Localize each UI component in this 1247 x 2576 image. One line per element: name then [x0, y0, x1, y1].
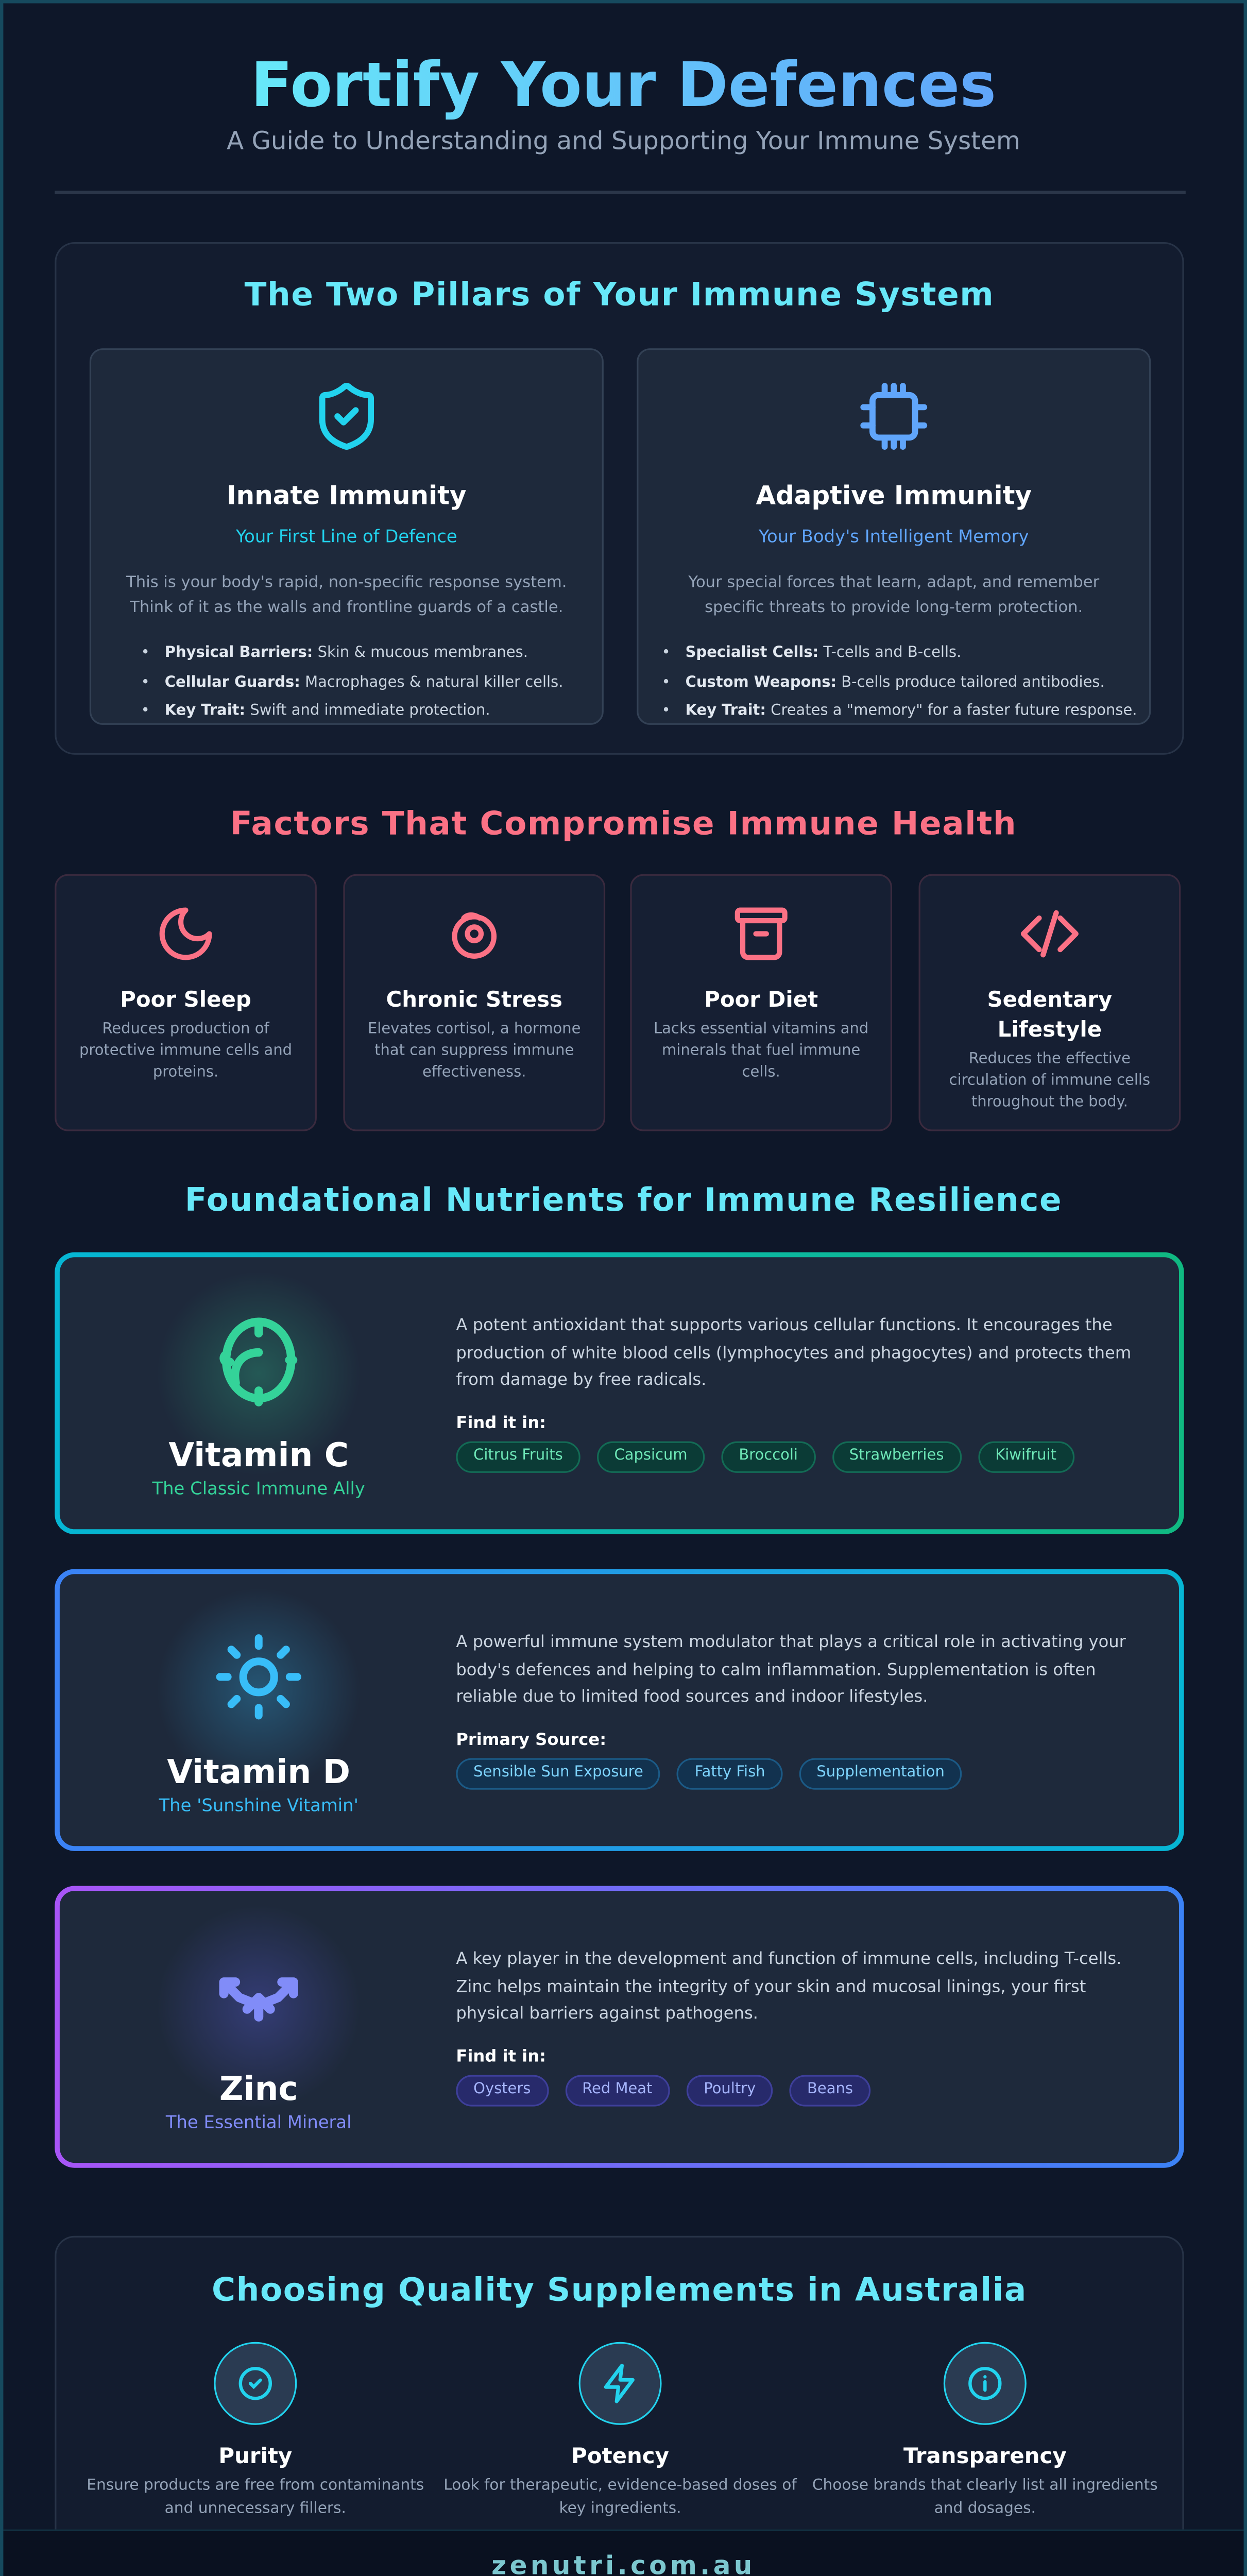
panel: zinc: A key player in the development and function of immune cells, including T-cells. Zinc helps maintain the integrity of your skin and mucosal linings, your first physical barriers against pathogens. [456, 1951, 1121, 2024]
card: adaptive immunity: Adaptive Immunity [756, 481, 1032, 511]
item: transparency: Transparency [903, 2445, 1067, 2470]
icon: vitamin c [219, 1318, 298, 1406]
panel: vitamin d: The 'Sunshine Vitamin' [159, 1797, 358, 1816]
panel: zinc: Find it in: [456, 2048, 546, 2066]
card: innate immunity: Physical Barriers: Skin & mucous membranes. [165, 645, 528, 662]
icon: code [1021, 910, 1079, 957]
panel: zinc [55, 1886, 1184, 2168]
icon: sun [216, 1634, 301, 1720]
card: poor diet: Lacks essential vitamins and minerals that fuel immune cells. [654, 1022, 868, 1081]
item: potency: Potency [571, 2445, 669, 2470]
panel: vitamin c: Vitamin C [168, 1435, 349, 1475]
item: purity [87, 2342, 424, 2517]
icon: zinc [219, 1977, 298, 2022]
panel: vitamin d [55, 1569, 1184, 1851]
item: transparency: Choose brands that clearly list all ingredients and dosages. [812, 2477, 1158, 2517]
panel: two pillars [55, 242, 1184, 755]
icon: check circle [214, 2342, 297, 2425]
panel: vitamin c: Capsicum [614, 1448, 688, 1465]
heading: factors: Factors That Compromise Immune Health [230, 804, 1017, 842]
panel: vitamin c: The Classic Immune Ally [152, 1480, 365, 1499]
card: innate immunity: Cellular Guards: Macrophages & natural killer cells. [165, 674, 563, 691]
card: innate immunity: Key Trait: Swift and immediate protection. [165, 703, 490, 720]
card: innate immunity: This is your body's rapid, non-specific response system. Think of it as the walls and frontline guards of a castle. [126, 574, 567, 617]
icon: chip [860, 383, 927, 450]
panel: vitamin c: Kiwifruit [995, 1448, 1056, 1465]
panel: vitamin d: Primary Source: [456, 1732, 606, 1750]
card: poor sleep [55, 874, 317, 1131]
card: sedentary lifestyle: Reduces the effective circulation of immune cells throughout the body. [949, 1052, 1150, 1111]
card: sedentary lifestyle: Sedentary [987, 989, 1112, 1013]
icon: info [944, 2342, 1027, 2425]
card: chronic stress: Elevates cortisol, a hormone that can suppress immune effectiveness. [368, 1022, 580, 1081]
card: sedentary lifestyle: Lifestyle [998, 1019, 1102, 1043]
card: chronic stress: Chronic Stress [386, 989, 562, 1013]
card: innate immunity: Innate Immunity [227, 481, 467, 511]
card: chronic stress [343, 874, 605, 1131]
card: sedentary lifestyle [919, 874, 1181, 1131]
panel: vitamin c: Citrus Fruits [473, 1448, 563, 1465]
heading: two pillars: The Two Pillars of Your Immune System [245, 275, 994, 313]
subtitle: A Guide to Understanding and Supporting Your Immune System [227, 126, 1020, 156]
panel: zinc: Oysters [473, 2081, 531, 2098]
card: adaptive immunity: Your special forces that learn, adapt, and remember specific threats to provide long-term protection. [688, 574, 1099, 617]
panel: vitamin c: Find it in: [456, 1415, 546, 1433]
card: adaptive immunity: Your Body's Intelligent Memory [759, 528, 1029, 547]
item: potency: Look for therapeutic, evidence-based doses of key ingredients. [443, 2477, 797, 2517]
title: Fortify Your Defences [251, 50, 996, 121]
card: adaptive immunity [637, 348, 1151, 725]
card: poor sleep: Reduces production of protective immune cells and proteins. [79, 1022, 292, 1081]
panel: vitamin c [55, 1252, 1184, 1534]
panel: vitamin c: Broccoli [739, 1448, 798, 1465]
item: purity: Purity [218, 2445, 292, 2470]
panel: quality supplements [55, 2236, 1184, 2568]
panel: vitamin d: A powerful immune system modulator that plays a critical role in activating your body's defences and helping to calm inflammation. Supplementation is often reliable due to limited food sources and indoor lifestyles. [456, 1634, 1126, 1707]
panel: vitamin c: Strawberries [849, 1448, 944, 1465]
icon: stress [452, 912, 497, 959]
heading: supplements: Choosing Quality Supplements in Australia [212, 2270, 1027, 2309]
panel: vitamin c: A potent antioxidant that supports various cellular functions. It encourages the production of white blood cells (lymphocytes and phagocytes) and protects them from damage by free radicals. [456, 1317, 1131, 1390]
panel: zinc: The Essential Mineral [166, 2113, 352, 2133]
card: adaptive immunity: Custom Weapons: B-cells produce tailored antibodies. [686, 674, 1105, 691]
heading: nutrients: Foundational Nutrients for Immune Resilience [185, 1181, 1062, 1219]
panel: zinc: Red Meat [582, 2081, 652, 2098]
panel: zinc: Zinc [219, 2069, 298, 2108]
panel: vitamin d: Sensible Sun Exposure [473, 1765, 643, 1782]
icon: shield [319, 383, 374, 450]
card: adaptive immunity: Specialist Cells: T-cells and B-cells. [686, 645, 961, 662]
icon: bolt [579, 2342, 662, 2425]
panel: vitamin d: Fatty Fish [695, 1765, 765, 1782]
panel: vitamin d: Supplementation [816, 1765, 945, 1782]
icon: moon [160, 908, 212, 960]
item: potency [443, 2342, 797, 2517]
icon: bin [734, 908, 788, 960]
panel: vitamin d: Vitamin D [167, 1752, 350, 1791]
card: poor diet: Poor Diet [704, 989, 818, 1013]
item: transparency [812, 2342, 1158, 2517]
item: purity: Ensure products are free from contaminants and unnecessary fillers. [87, 2477, 424, 2517]
panel: zinc: Poultry [704, 2081, 756, 2098]
card: poor sleep: Poor Sleep [120, 989, 251, 1013]
footer [3, 2530, 1244, 2576]
card: adaptive immunity: Key Trait: Creates a "memory" for a faster future response. [686, 703, 1137, 720]
card: innate immunity: Your First Line of Defence [236, 528, 457, 547]
panel: zinc: Beans [807, 2081, 853, 2098]
card: poor diet [630, 874, 892, 1131]
card: innate immunity [90, 348, 604, 725]
